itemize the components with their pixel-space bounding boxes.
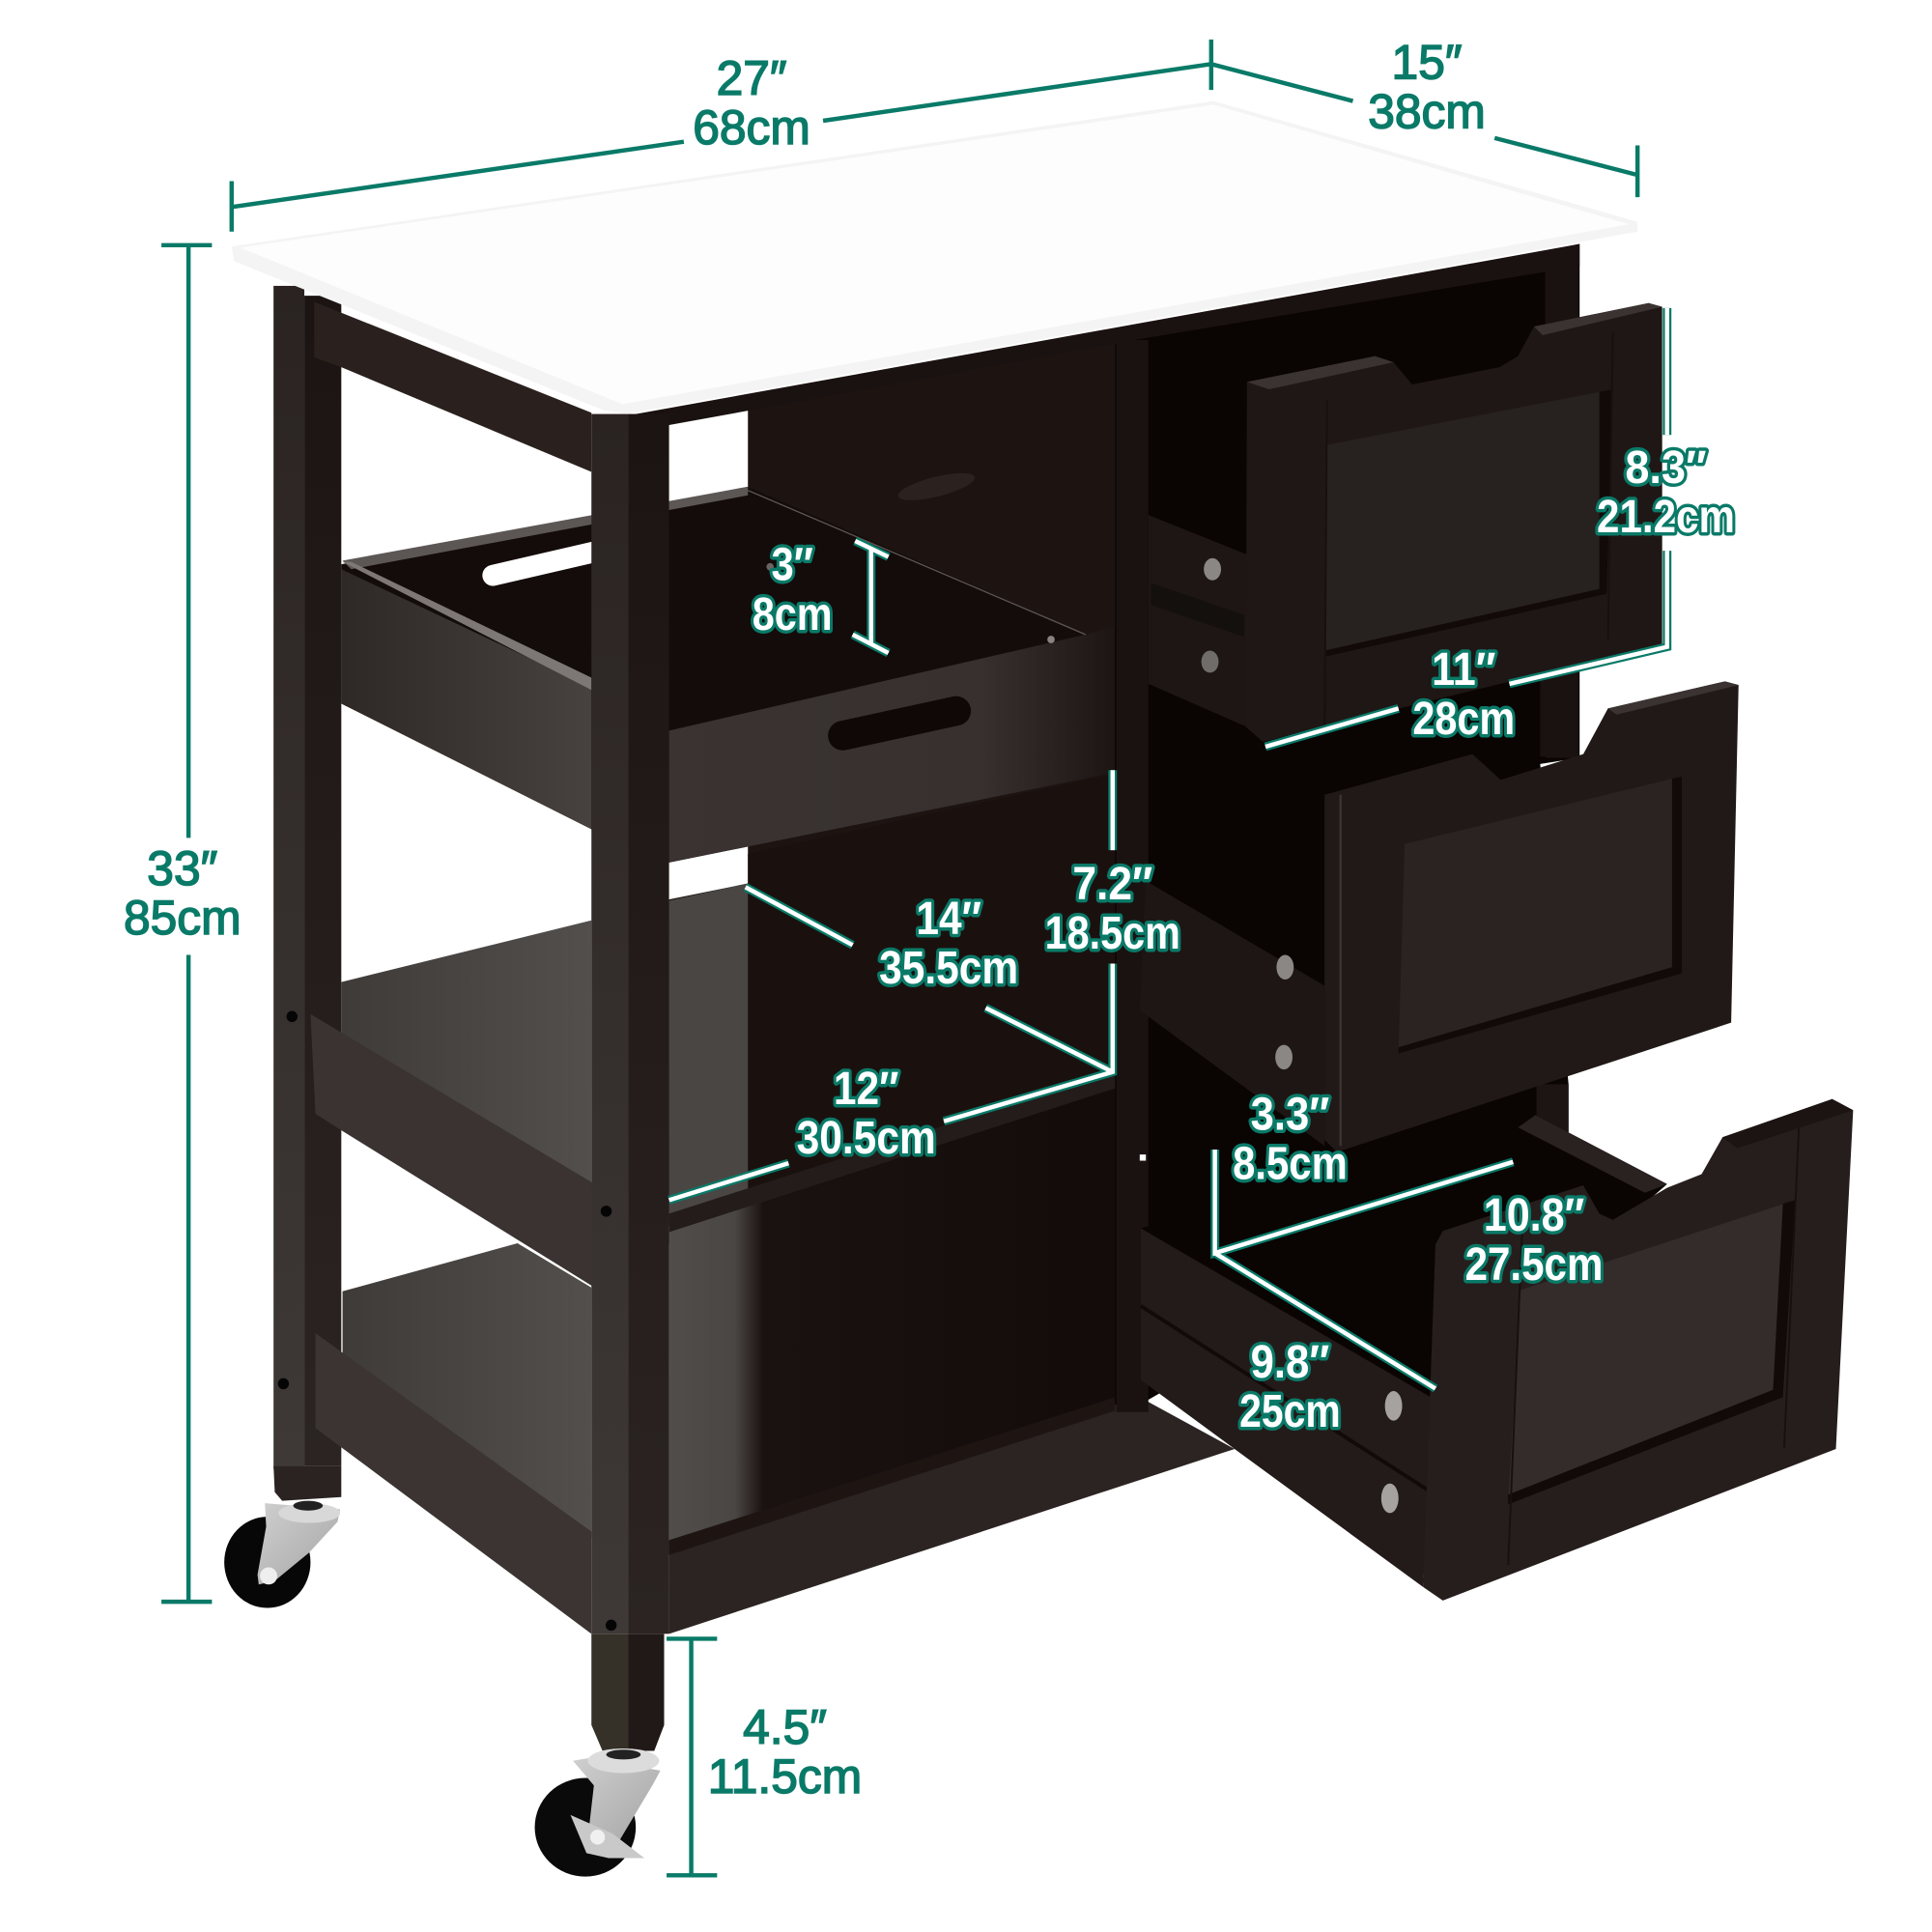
upper side apron bbox=[314, 301, 591, 472]
drawer 3 front bbox=[1423, 1099, 1853, 1601]
drawer interior dimensions 3.3, 10.8 and 9.8 in bbox=[1215, 1089, 1603, 1437]
outer dimension: width 27 in bbox=[232, 40, 1211, 232]
drawer interior dimensions 3.3, 10.8 and 9.8 in: 10.8″ bbox=[1484, 1189, 1584, 1241]
front leg bbox=[278, 414, 669, 1751]
top drawer tray bbox=[341, 487, 1115, 863]
shelf dimensions 7.2, 14 and 12 in: 30.5cm bbox=[797, 1112, 936, 1164]
drawer front dimensions 8.3 in and 11 in bbox=[1265, 308, 1735, 747]
white tabletop bbox=[232, 101, 1637, 414]
middle shelf bbox=[310, 773, 1119, 1287]
drawer 3 side and screws bbox=[1141, 1229, 1433, 1587]
shelf dimensions 7.2, 14 and 12 in: 14″ bbox=[916, 893, 981, 945]
drawer interior dimensions 3.3, 10.8 and 9.8 in: 8.5cm bbox=[1233, 1138, 1348, 1190]
right drawer cabinet body bbox=[622, 244, 1579, 1412]
outer dimension: depth 15 in: 15″ bbox=[1392, 36, 1463, 90]
drawer 1 front bbox=[1246, 303, 1662, 742]
outer dimension: width 27 in: 68cm bbox=[693, 100, 810, 155]
drawer interior dimensions 3.3, 10.8 and 9.8 in: 3.3″ bbox=[1251, 1089, 1329, 1141]
drawer front dimensions 8.3 in and 11 in: 8.3″ bbox=[1625, 441, 1707, 494]
tray depth dimension 3 in bbox=[753, 539, 889, 653]
drawer front dimensions 8.3 in and 11 in: 11″ bbox=[1432, 643, 1495, 696]
upper back panel bbox=[748, 335, 1127, 887]
front caster bbox=[535, 1748, 661, 1877]
shelf dimensions 7.2, 14 and 12 in: 35.5cm bbox=[879, 942, 1018, 994]
outer dimension: clearance 4.5 in bbox=[667, 1638, 862, 1875]
drawer front dimensions 8.3 in and 11 in: 21.2cm bbox=[1597, 491, 1735, 543]
outer dimension: clearance 4.5 in: 11.5cm bbox=[708, 1749, 862, 1804]
outer dimension: height 33 in: 85cm bbox=[124, 891, 242, 945]
outer dimension: width 27 in: 27″ bbox=[717, 51, 787, 105]
drawer interior dimensions 3.3, 10.8 and 9.8 in: 27.5cm bbox=[1465, 1238, 1603, 1291]
outer dimension: clearance 4.5 in: 4.5″ bbox=[743, 1700, 827, 1754]
outer dimension: depth 15 in bbox=[1211, 36, 1637, 197]
shelf dimensions 7.2, 14 and 12 in bbox=[669, 770, 1180, 1200]
drawer 2 front bbox=[1324, 681, 1739, 1152]
drawer front dimensions 8.3 in and 11 in: 28cm bbox=[1412, 693, 1515, 745]
drawer 3 interior bbox=[1141, 1115, 1667, 1410]
tray depth dimension 3 in: 3″ bbox=[771, 539, 813, 591]
tray handle slot bbox=[842, 711, 956, 735]
outer dimension: depth 15 in: 38cm bbox=[1368, 85, 1486, 139]
tray depth dimension 3 in: 8cm bbox=[753, 588, 833, 640]
lower back panel bbox=[669, 1084, 1140, 1547]
drawer 2 side and screws bbox=[1140, 881, 1324, 1146]
drawer interior dimensions 3.3, 10.8 and 9.8 in: 25cm bbox=[1239, 1385, 1341, 1437]
shelf dimensions 7.2, 14 and 12 in: 7.2″ bbox=[1072, 858, 1152, 910]
drawer 1 side and screws bbox=[1149, 515, 1247, 727]
shelf dimensions 7.2, 14 and 12 in: 18.5cm bbox=[1045, 907, 1180, 959]
outer dimension: height 33 in bbox=[124, 245, 242, 1602]
back left leg bbox=[273, 286, 341, 1501]
outer dimension: height 33 in: 33″ bbox=[147, 841, 217, 895]
shelf dimensions 7.2, 14 and 12 in: 12″ bbox=[834, 1063, 898, 1115]
lower shelf bbox=[316, 1243, 1235, 1634]
back caster bbox=[224, 1501, 340, 1608]
drawer interior dimensions 3.3, 10.8 and 9.8 in: 9.8″ bbox=[1251, 1336, 1329, 1388]
